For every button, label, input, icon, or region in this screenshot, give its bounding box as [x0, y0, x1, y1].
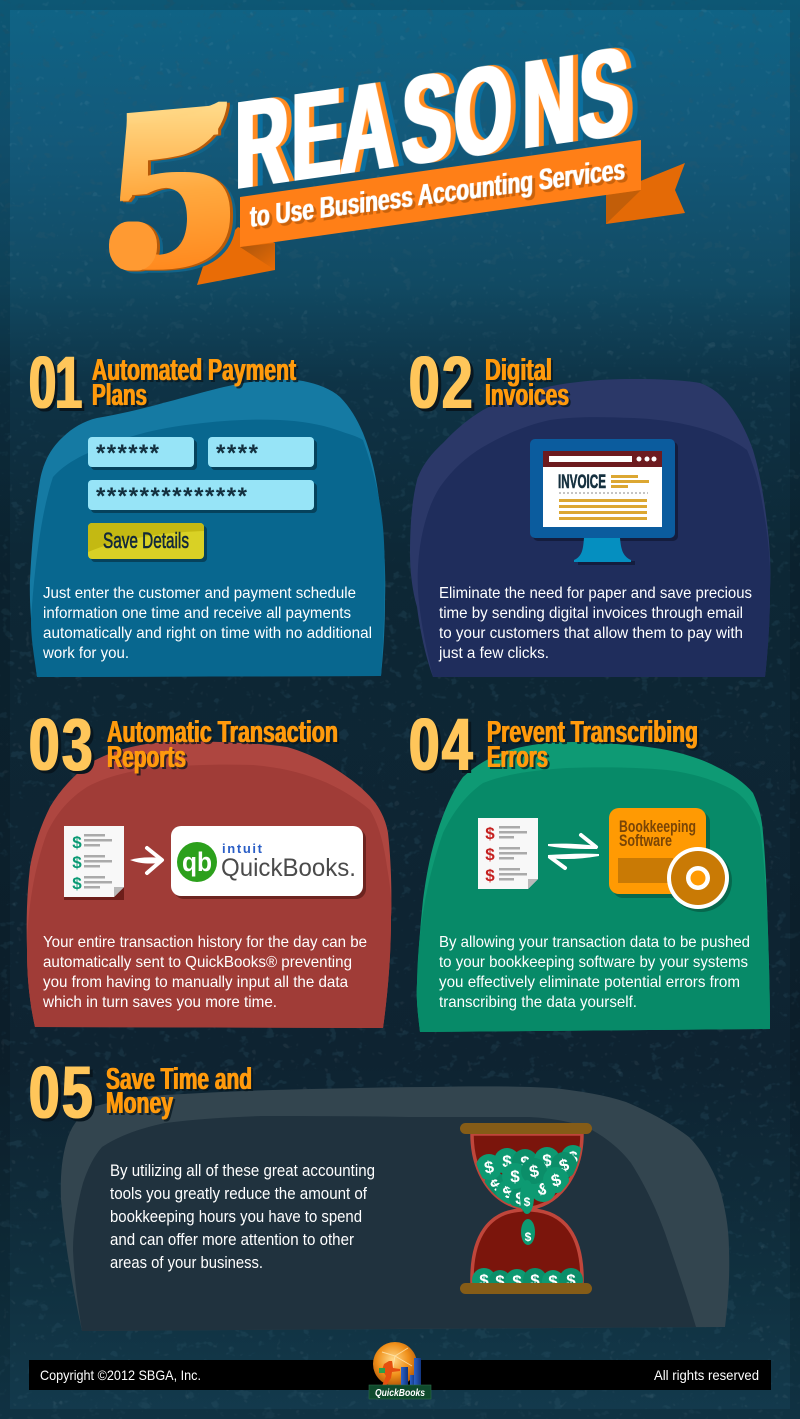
text 03: Your entire transaction history for the day can be — [43, 934, 367, 951]
icon: transaction document: $ — [485, 866, 495, 885]
coins in lower bulb: $ — [512, 1272, 522, 1291]
text 04: to your bookkeeping software by your systems — [439, 954, 748, 971]
text 05: tools you greatly reduce the amount of — [110, 1184, 367, 1203]
number 03: 03 — [29, 703, 92, 786]
coins in lower bulb: $ — [548, 1272, 558, 1291]
heading 03 — [107, 714, 338, 774]
text 03: automatically sent to QuickBooks® preventing — [43, 954, 352, 971]
intuit wordmark: intuit — [222, 841, 263, 856]
heading 04: Errors — [487, 739, 548, 774]
input field: short 2: **** — [216, 440, 259, 467]
icon: QuickBooks circle: qb — [182, 847, 212, 877]
heading 03: Automatic Transaction — [107, 714, 338, 749]
icon: transaction document: $ — [485, 845, 495, 864]
panel 04: prevent transcribing errors — [409, 703, 770, 1032]
panel 03: automatic transaction reports — [27, 703, 391, 1028]
footer bar — [29, 1360, 771, 1390]
coins in upper bulb: $ — [549, 1170, 564, 1191]
coins in upper bulb: $ — [528, 1161, 541, 1182]
text 02 — [438, 585, 752, 662]
QuickBooks logo card — [171, 826, 366, 899]
panel 01: automated payment plans — [29, 342, 385, 677]
ribbon band — [240, 140, 641, 247]
text 05: By utilizing all of these great accounting — [110, 1161, 375, 1180]
number 05: 05 — [29, 1051, 92, 1134]
number 02: 02 — [409, 341, 472, 424]
coins in upper bulb: $ — [568, 1148, 578, 1167]
input field: long — [88, 480, 317, 513]
heading 01 — [92, 352, 296, 412]
coins in lower bulb: $ — [495, 1272, 505, 1291]
input field: long: ************** — [96, 483, 248, 510]
icon: transaction document — [478, 818, 538, 889]
text 03: which in turn saves you more time. — [42, 994, 277, 1011]
text 01: Just enter the customer and payment schedule — [43, 585, 356, 602]
hourglass caps — [460, 1123, 592, 1294]
text 04: By allowing your transaction data to be pushed — [439, 934, 750, 951]
input field: short 1: ****** — [96, 440, 160, 467]
heading 05 — [106, 1061, 252, 1120]
icon: bookkeeping software box — [609, 808, 732, 912]
big number 5: 5 — [113, 50, 235, 321]
heading 01: Plans — [92, 377, 147, 412]
text 01: information one time and receive all payments — [43, 605, 351, 622]
panel 03 shape — [27, 741, 391, 1028]
panel 04 shape — [417, 742, 770, 1032]
coins in upper bulb: $ — [510, 1167, 520, 1186]
panel 02 shape — [410, 379, 770, 677]
QuickBooks badge logo: QuickBooks — [375, 1388, 425, 1399]
coins in upper bulb: $ — [535, 1178, 551, 1199]
rights text: All rights reserved — [654, 1367, 759, 1383]
text 05: and can offer more attention to other — [110, 1230, 354, 1249]
heading 05: Money — [106, 1085, 174, 1120]
icon: transaction document: $ — [72, 833, 82, 852]
text 05: bookkeeping hours you have to spend — [110, 1207, 362, 1226]
text 03: you from having to manually input all the data — [43, 974, 348, 991]
icon: transaction document: $ — [72, 853, 82, 872]
falling coin — [521, 1219, 535, 1245]
text 01: automatically and right on time with no additional — [43, 625, 372, 642]
icon: disc — [667, 847, 732, 912]
icon: bookkeeping software box: Bookkeeping — [619, 817, 696, 836]
icon: transaction document: $ — [72, 874, 82, 893]
text 04 — [439, 934, 750, 1011]
text 04: you effectively eliminate potential errors from — [439, 974, 740, 991]
panel 05: save time and money — [29, 1051, 729, 1331]
coins in upper bulb: $ — [524, 1195, 531, 1209]
coins in upper bulb: $ — [483, 1157, 496, 1178]
text 02: Eliminate the need for paper and save precious — [439, 585, 752, 602]
heading 04 — [487, 714, 698, 774]
input field: short 1 — [88, 437, 197, 470]
hourglass glass — [472, 1134, 582, 1283]
coins in lower bulb — [472, 1268, 583, 1283]
coins in upper bulb: $ — [487, 1175, 506, 1196]
icon: two-way arrows — [548, 835, 599, 868]
text 04: transcribing the data yourself. — [439, 994, 637, 1011]
panel 05 shape — [61, 1086, 729, 1331]
coins in upper bulb: $ — [502, 1152, 512, 1171]
heading 02: Invoices — [485, 377, 569, 412]
icon: transaction document: $ — [485, 824, 495, 843]
title group — [113, 21, 685, 321]
coins in lower bulb: $ — [530, 1271, 540, 1290]
QuickBooks badge logo — [369, 1342, 431, 1399]
icon: invoice monitor — [530, 439, 678, 565]
save details button — [88, 523, 207, 562]
heading 05: Save Time and — [106, 1061, 252, 1096]
save details button: Save Details — [103, 528, 189, 553]
number 04: 04 — [409, 703, 472, 786]
ribbon subtitle: to Use Business Accounting Services — [250, 153, 625, 234]
ribbon left tail — [197, 227, 275, 285]
heading 01: Automated Payment — [92, 352, 296, 387]
input field: short 2 — [208, 437, 317, 470]
panel 02: digital invoices — [409, 341, 770, 677]
text 03 — [42, 934, 367, 1011]
icon: invoice monitor: INVOICE — [558, 472, 606, 493]
ribbon right tail — [606, 163, 685, 224]
arrow — [130, 848, 162, 873]
copyright text: Copyright ©2012 SBGA, Inc. — [40, 1367, 201, 1383]
icon: bookkeeping software box: Software — [619, 831, 672, 850]
coins in upper bulb — [476, 1145, 585, 1214]
text 02: to your customers that allow them to pay with — [439, 625, 743, 642]
number 01: 01 — [29, 342, 82, 425]
coins in upper bulb: $ — [515, 1189, 525, 1208]
text 01 — [42, 585, 372, 662]
panel 01 shape — [30, 379, 385, 677]
coins in lower bulb: $ — [479, 1271, 489, 1290]
text 02: time by sending digital invoices through email — [439, 605, 743, 622]
coins in upper bulb: $ — [500, 1182, 517, 1203]
QuickBooks wordmark: QuickBooks. — [221, 854, 356, 882]
text 01: work for you. — [42, 645, 129, 662]
coins in upper bulb: $ — [542, 1151, 552, 1170]
heading REASONS: REASONS — [235, 21, 629, 215]
text 05 — [110, 1161, 375, 1272]
coins in upper bulb: $ — [557, 1155, 572, 1176]
heading 04: Prevent Transcribing — [487, 714, 698, 749]
heading 03: Reports — [107, 739, 186, 774]
coins in lower bulb: $ — [566, 1271, 576, 1290]
payment form — [88, 437, 317, 562]
falling coin: $ — [525, 1230, 532, 1244]
icon: hourglass with coins — [460, 1123, 592, 1294]
heading 02: Digital — [485, 352, 552, 387]
heading 02 — [485, 352, 569, 412]
text 02: just a few clicks. — [438, 645, 549, 662]
text 05: areas of your business. — [110, 1253, 263, 1272]
coins in upper bulb: $ — [520, 1153, 530, 1172]
icon: transaction document — [64, 826, 124, 900]
icon: QuickBooks circle — [177, 842, 217, 882]
